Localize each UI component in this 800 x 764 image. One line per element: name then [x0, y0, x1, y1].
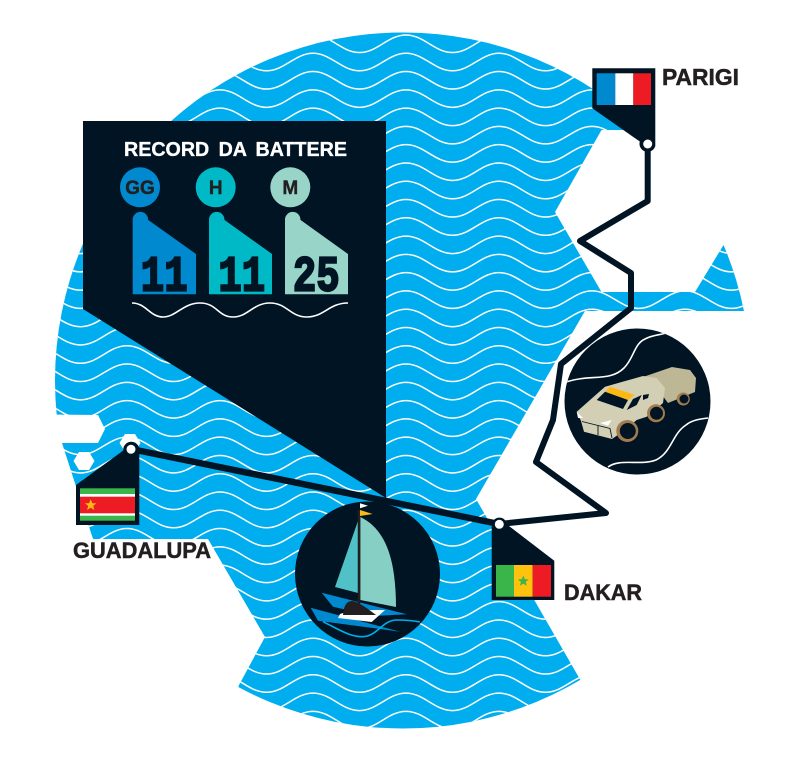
stat: 25 minuti [285, 212, 348, 306]
panel wave [132, 303, 348, 317]
route: dakar to guadalupa [131, 449, 499, 524]
route: paris to dakar [499, 144, 648, 524]
label: dakar: DAKAR [564, 580, 642, 605]
pin: guadalupa [76, 442, 139, 525]
land: americas [0, 414, 265, 764]
badge: H: H [209, 178, 223, 199]
flag: guadeloupe [80, 488, 135, 521]
heading: RECORD DA BATTERE [124, 138, 347, 161]
label: parigi: PARIGI [662, 64, 739, 90]
land: europe and africa [476, 130, 800, 764]
stat: 11 ore [209, 212, 272, 306]
stat: 11 giorni [133, 212, 196, 306]
badge: M: M [282, 178, 298, 199]
icon: rally truck [564, 328, 710, 474]
icon: sailing boat [295, 502, 440, 646]
badge: GG [120, 167, 160, 207]
pin: dakar [492, 518, 554, 600]
ocean globe with waves [55, 32, 744, 728]
pin: parigi [592, 68, 655, 152]
badge: GG: GG [125, 178, 155, 199]
badge: H [196, 167, 236, 207]
stat: 11 giorni: 11 [141, 250, 188, 306]
stat: 11 ore: 11 [218, 250, 265, 306]
label: guadalupa: GUADALUPA [73, 538, 211, 563]
flag: france [597, 73, 651, 105]
badge: M [270, 167, 310, 207]
stat: 25 minuti: 25 [293, 250, 340, 306]
panel: record da battere [83, 121, 386, 498]
flag: senegal [496, 565, 551, 597]
